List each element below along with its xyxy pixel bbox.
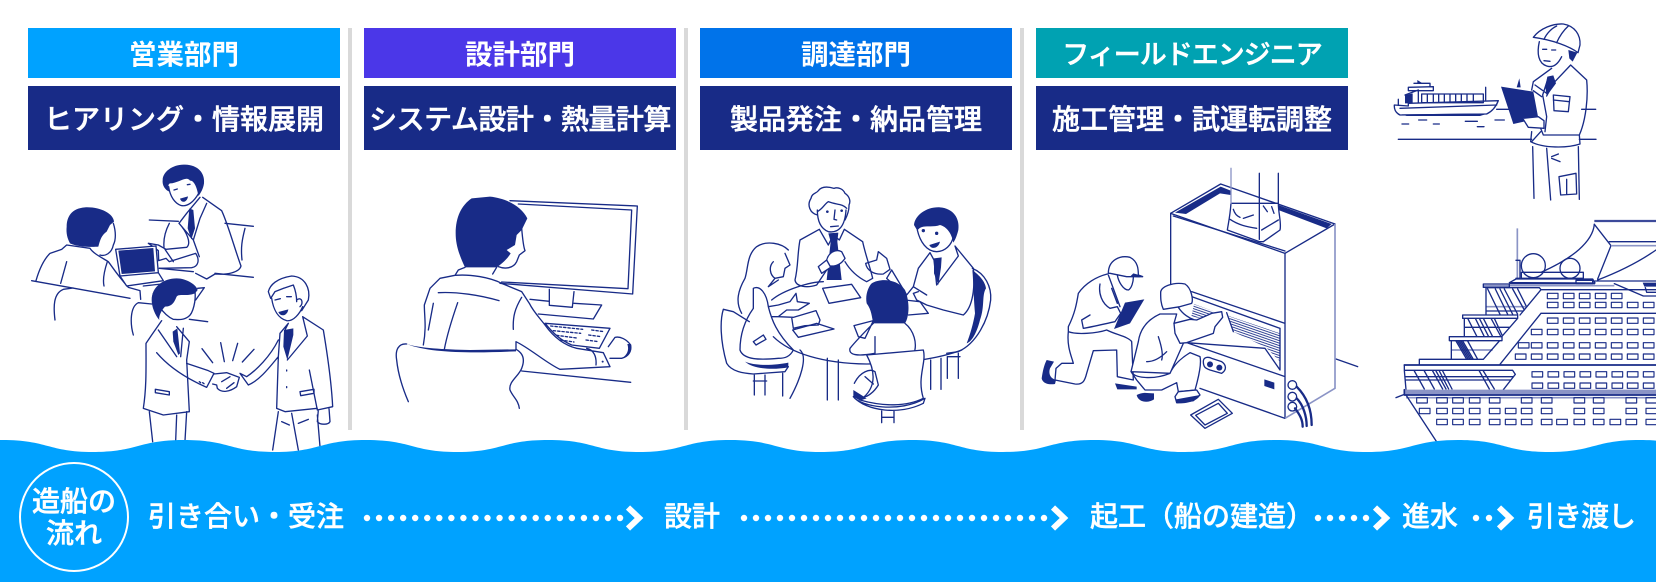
person: right man shaking hands (240, 276, 333, 450)
person: designer from behind (396, 197, 631, 408)
flow badge: shipbuilding flow: 造船の (32, 486, 116, 517)
task label: sales: ヒアリング・情報展開 (44, 104, 324, 135)
illustration: cruise ship (1395, 220, 1656, 442)
person: curly-haired man (795, 187, 873, 287)
heading: sales department: 営業部門 (129, 39, 239, 70)
flow step: delivery: 引き渡し (1527, 501, 1635, 532)
task label: sales (28, 86, 340, 150)
monitor (500, 201, 637, 319)
person: woman from behind at front (850, 280, 925, 423)
heading: field engineer: フィールドエンジニア (1062, 40, 1322, 70)
arrow: design to construction (740, 505, 1068, 531)
flow badge: shipbuilding flow: 流れ (46, 518, 102, 549)
person: man in suit gesturing (866, 207, 991, 353)
illustration: supervisor watching container ship (1394, 23, 1597, 201)
task label: field engineer: 施工管理・試運転調整 (1052, 104, 1332, 135)
table and documents (772, 282, 962, 400)
person: crouching worker (1131, 283, 1223, 403)
heading: procurement department: 調達部門 (801, 39, 911, 70)
container ship (1394, 80, 1596, 139)
task label: field engineer (1036, 86, 1348, 150)
arrow: order to design (364, 505, 644, 531)
task label: procurement: 製品発注・納品管理 (730, 104, 982, 135)
illustration: designer at computer (396, 196, 638, 409)
heading: design department: 設計部門 (465, 39, 575, 70)
heading: design department (364, 28, 676, 78)
flow badge: shipbuilding flow (19, 462, 129, 572)
flow step: keel laying: 起工（船の建造） (1090, 501, 1314, 532)
panel: sales department (28, 28, 340, 150)
illustration: procurement round-table meeting (720, 186, 992, 424)
person: kneeling worker (1042, 257, 1144, 389)
panel: field engineer (1036, 28, 1348, 150)
panel: procurement department (700, 28, 1012, 150)
person: seated client with laptop (32, 207, 163, 335)
person: supervisor with hard hat (1501, 24, 1587, 200)
person: standing salesman (148, 165, 253, 279)
flow step: launch: 進水 (1402, 501, 1458, 532)
keyboard (545, 323, 610, 348)
duct (1227, 168, 1280, 242)
equipment: air handling unit (1171, 184, 1358, 427)
person: left man shaking hands (143, 278, 254, 442)
heading: procurement department (700, 28, 1012, 78)
panel: design department (364, 28, 676, 150)
flow step: design: 設計 (664, 501, 720, 532)
arrow: launch to delivery (1472, 505, 1514, 531)
heading: field engineer (1036, 28, 1348, 78)
heading: sales department (28, 28, 340, 78)
task label: design: システム設計・熱量計算 (369, 104, 671, 135)
ship funnel and upper deck (1509, 221, 1656, 296)
task label: design (364, 86, 676, 150)
illustration: field engineers at air handling unit (1042, 168, 1358, 429)
ship terraced decks (1396, 284, 1656, 443)
person: long-haired woman on the left (721, 243, 820, 398)
task label: procurement (700, 86, 1012, 150)
clipboard on floor (1191, 399, 1232, 428)
illustration: sales meeting and handshake (31, 164, 334, 451)
flow step: inquiry and order: 引き合い・受注 (148, 501, 344, 532)
ship windows (1417, 293, 1656, 425)
arrow: construction to launch (1314, 505, 1390, 531)
